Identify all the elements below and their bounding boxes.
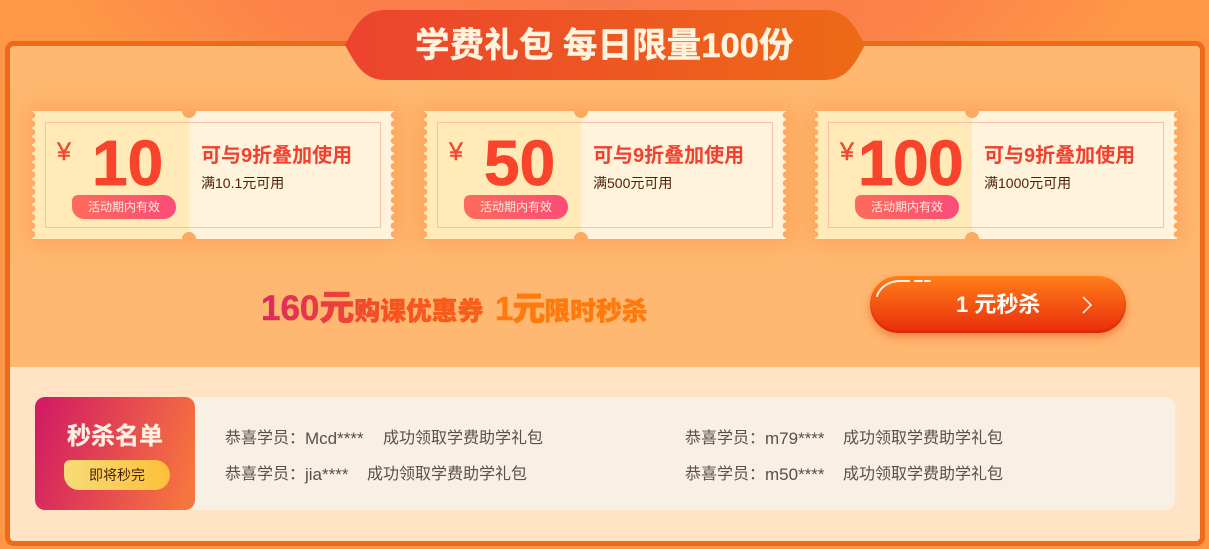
title text: 学费礼包 每日限量100份 <box>415 27 794 65</box>
zigzag right edge <box>1173 111 1177 239</box>
coupon heading: 可与9折叠加使用 <box>201 145 352 167</box>
list header block <box>35 397 195 510</box>
list row 1 right: m79**** <box>765 429 825 448</box>
coupon condition: 满500元可用 <box>593 175 672 191</box>
coupon: 100 yuan <box>815 111 1177 239</box>
amount: 100 <box>858 127 963 199</box>
list row 2 right: 恭喜学员： <box>685 466 765 483</box>
validity pill: 活动期内有效 <box>88 200 160 214</box>
coupon heading: 可与9折叠加使用 <box>593 145 744 167</box>
title banner <box>345 10 864 80</box>
list row 2 left: jia**** <box>305 465 348 484</box>
coupon condition: 满1000元可用 <box>984 175 1071 191</box>
validity pill <box>855 195 959 219</box>
list row 1 right: 恭喜学员： <box>685 430 765 447</box>
banner shape <box>345 10 864 80</box>
validity pill: 活动期内有效 <box>871 200 943 214</box>
panel: lower section background <box>10 367 1200 541</box>
list row 1 left: 成功领取学费助学礼包 <box>383 430 543 447</box>
status pill: 即将秒完 <box>89 467 145 483</box>
list row 2 left <box>225 465 527 484</box>
currency symbol: ¥ <box>57 138 71 166</box>
slogan second part: 1元限时秒杀 <box>495 290 648 327</box>
button highlight <box>876 280 931 297</box>
button: 1 yuan flash sale <box>870 276 1126 333</box>
inner border <box>437 122 773 228</box>
list row 1 right: 成功领取学费助学礼包 <box>843 430 1003 447</box>
slogan <box>262 290 648 327</box>
bottom notch <box>965 232 979 239</box>
zigzag left edge <box>815 111 819 239</box>
list row 2 right: m50**** <box>765 465 825 484</box>
coupon condition: 满10.1元可用 <box>201 175 284 191</box>
validity pill <box>72 195 176 219</box>
button label: 1 元秒杀 <box>956 292 1040 317</box>
inner border <box>828 122 1164 228</box>
validity pill <box>464 195 568 219</box>
chevron icon <box>1082 296 1092 314</box>
coupon: 50 yuan <box>424 111 786 239</box>
list row 2 right: 成功领取学费助学礼包 <box>843 466 1003 483</box>
list row 2 right <box>685 465 1003 484</box>
list row 2 left: 恭喜学员： <box>225 466 305 483</box>
top notch <box>574 111 588 118</box>
validity pill: 活动期内有效 <box>480 200 552 214</box>
currency symbol: ¥ <box>840 138 854 166</box>
top notch <box>965 111 979 118</box>
currency symbol: ¥ <box>449 138 463 166</box>
amount: 50 <box>484 127 555 199</box>
inner border <box>45 122 381 228</box>
coupon left section <box>815 111 972 239</box>
amount: 10 <box>92 127 163 199</box>
coupon left section <box>32 111 189 239</box>
list row 1 left: Mcd**** <box>305 429 364 448</box>
list row 1 left <box>225 429 543 448</box>
zigzag right edge <box>782 111 786 239</box>
bottom notch <box>182 232 196 239</box>
list row 1 right <box>685 429 1003 448</box>
coupon left section <box>424 111 581 239</box>
zigzag left edge <box>424 111 428 239</box>
list row 1 left: 恭喜学员： <box>225 430 305 447</box>
zigzag right edge <box>390 111 394 239</box>
bottom notch <box>574 232 588 239</box>
zigzag left edge <box>32 111 36 239</box>
coupon: 10 yuan <box>32 111 394 239</box>
top notch <box>182 111 196 118</box>
panel: winners list <box>35 397 1175 510</box>
status pill <box>64 460 170 490</box>
list heading: 秒杀名单 <box>67 423 163 450</box>
list row 2 left: 成功领取学费助学礼包 <box>367 466 527 483</box>
coupon heading: 可与9折叠加使用 <box>984 145 1135 167</box>
